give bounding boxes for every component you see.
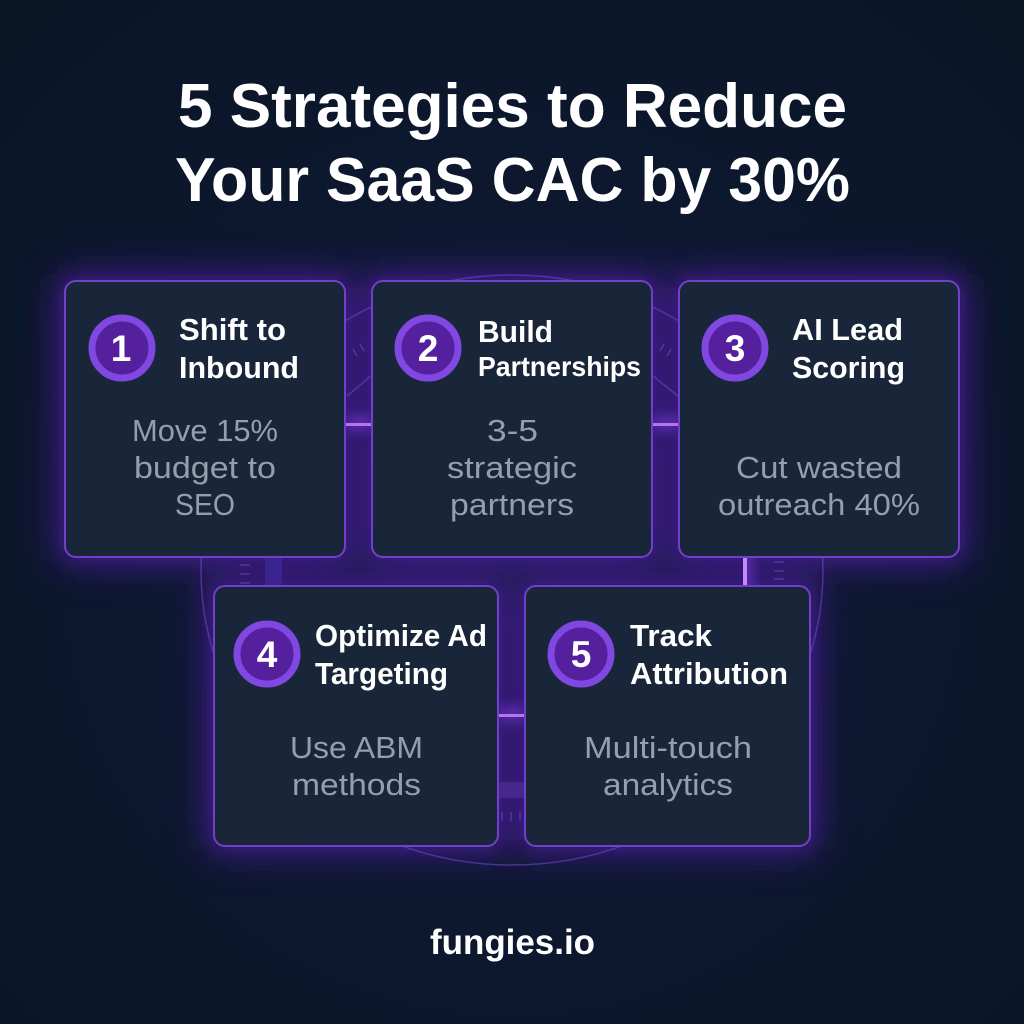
description 2: partners [450,487,574,522]
badge 3 [705,318,765,378]
heading 3: AI Lead [792,312,903,347]
connector glow [346,416,679,721]
badge 2 [398,318,458,378]
heading 5 [630,618,788,691]
description 2 [447,413,577,522]
heading 2: Build [478,314,553,349]
badge 1: 1 [111,328,131,369]
panel: step 4 [214,586,498,846]
heading 2 [478,314,641,382]
description 2: strategic [447,450,577,485]
title: Your SaaS CAC by 30% [175,146,850,215]
description 5: analytics [603,767,733,802]
heading 4: Optimize Ad [315,618,487,653]
heading 1: Shift to [179,312,286,347]
description 5: Multi-touch [584,730,752,765]
description 5 [584,730,752,802]
description 4: methods [292,767,421,802]
circuit blocks [265,558,761,798]
title [175,72,850,215]
footer brand: fungies.io [430,923,595,962]
badge 5 [551,624,611,684]
heading 5: Track [630,618,713,653]
connector: 2 to 3 [653,423,679,426]
heading 2: Partnerships [478,351,641,382]
badge 1 [92,318,152,378]
description 1: budget to [134,450,276,485]
heading 3: Scoring [792,350,905,385]
badge 4: 4 [257,634,278,675]
panel: step 2 [372,281,652,557]
heading 5: Attribution [630,656,788,691]
description 1: SEO [175,487,235,522]
heading 1 [179,312,299,385]
description 4 [290,730,423,802]
heading 1: Inbound [179,350,299,385]
badge 4 [237,624,297,684]
heading 4 [315,618,487,691]
description 1: Move 15% [132,413,278,448]
background circuit ring [201,275,823,865]
connector: 4 to 5 [499,714,525,717]
connector: 3 to 5 [743,558,747,585]
heading 3 [792,312,905,385]
connector: 1 to 2 [346,423,372,426]
description 3: Cut wasted [736,450,902,485]
description 1 [132,413,278,522]
panel: step 5 [525,586,810,846]
badge 5: 5 [571,634,591,675]
description 3: outreach 40% [718,487,920,522]
badge 2: 2 [418,328,438,369]
description 4: Use ABM [290,730,423,765]
heading 4: Targeting [315,656,448,691]
panel: step 1 [65,281,345,557]
description 3 [718,450,920,522]
panel: step 3 [679,281,959,557]
title: 5 Strategies to Reduce [178,72,847,141]
card glow [58,274,966,853]
description 2: 3-5 [487,413,538,448]
badge 3: 3 [725,328,745,369]
